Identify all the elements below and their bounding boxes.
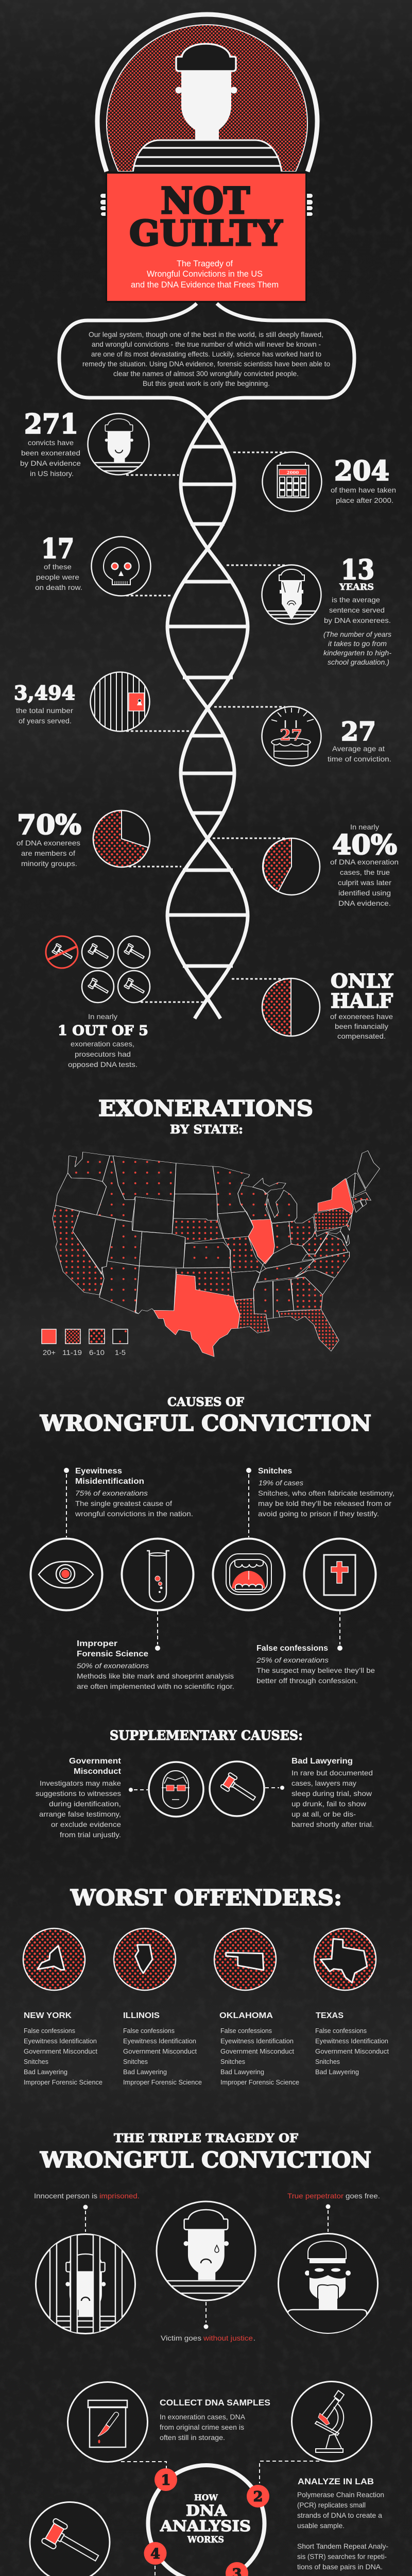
stat: 271: by DNA evidence xyxy=(20,459,81,467)
stat: 40%: of DNA exoneration xyxy=(330,858,399,866)
cause: false confessions: better off through confession. xyxy=(256,1676,358,1685)
stat: only half: HALF xyxy=(331,989,393,1012)
icon: microscope xyxy=(291,2381,372,2462)
list: Texas: Government Misconduct xyxy=(315,2047,389,2055)
tragedy: victim without justice xyxy=(154,2201,258,2342)
step 1: collect DNA samples: from original crime seen is xyxy=(160,2423,244,2431)
intro text: Our legal system, though one of the best in the world, is still deeply flawed, xyxy=(89,330,323,338)
list: Texas: Bad Lawyering xyxy=(315,2068,359,2076)
stat: 204: 204 xyxy=(334,455,389,487)
main DNA helix xyxy=(167,419,248,1019)
map legend: 6-10 xyxy=(89,1348,105,1357)
cause: snitches: Snitches, who often fabricate testimony, xyxy=(258,1489,394,1497)
supplementary: bad lawyering: Bad Lawyering xyxy=(291,1757,353,1766)
supplementary: government misconduct: or exclude evidence xyxy=(51,1820,121,1828)
icon: gavel xyxy=(210,1761,264,1816)
stat: 3,494: 3,494 xyxy=(14,682,75,704)
stat: 1 out of 5 xyxy=(58,1012,148,1069)
stat: 17 xyxy=(35,533,82,591)
heading: causes of wrongful conviction xyxy=(40,1395,371,1436)
title: GUILTY xyxy=(129,213,283,253)
gavel icons: 1 of 5 xyxy=(46,936,150,1003)
cause: snitches: Snitches xyxy=(258,1467,292,1476)
subtitle: and the DNA Evidence that Frees Them xyxy=(131,280,279,290)
stat: 13 years: YEARS xyxy=(339,582,374,592)
list: New York: Snitches xyxy=(24,2058,48,2065)
supplementary: bad lawyering: barred shortly after trial. xyxy=(291,1820,374,1828)
heading: causes of wrongful conviction: CAUSES OF xyxy=(167,1395,245,1409)
DNA analysis ring xyxy=(144,2465,269,2576)
list: New York: Eyewitness Identification xyxy=(24,2037,97,2045)
step 1: collect DNA samples: often still in storage. xyxy=(160,2433,225,2442)
stat: 271: been exonerated xyxy=(21,449,80,457)
stat: only half: been financially xyxy=(335,1022,388,1030)
step numbers: 4 xyxy=(150,2546,160,2562)
stat: 13 years: 13 xyxy=(341,554,374,586)
cause: false confessions xyxy=(256,1611,375,1685)
tragedy: innocent imprisoned: Innocent person is xyxy=(34,2192,97,2200)
step 2: analyze in lab: Polymerase Chain Reaction xyxy=(297,2490,384,2499)
supplementary: bad lawyering: In rare but documented xyxy=(291,1769,373,1777)
stat: 13 years: it takes to go from xyxy=(328,639,387,648)
map legend: 1-5 xyxy=(115,1348,126,1357)
step 1: collect DNA samples: COLLECT DNA SAMPLES xyxy=(160,2398,270,2408)
cause: forensic science: Improper xyxy=(77,1639,117,1648)
cause: eyewitness: Misidentification xyxy=(75,1477,144,1486)
stat: 3,494 xyxy=(14,682,75,725)
heading: supplementary causes: SUPPLEMENTARY CAUSES: xyxy=(110,1728,303,1743)
list: New York: Government Misconduct xyxy=(24,2047,97,2055)
left hand xyxy=(100,192,124,218)
stat: 13 years: (The number of years xyxy=(323,630,391,638)
supplementary: bad lawyering: cases, lawyers may xyxy=(291,1779,356,1787)
stat: 70%: minority groups. xyxy=(21,859,77,868)
cause: eyewitness: Eyewitness xyxy=(75,1467,122,1476)
cause: snitches: may be told they’ll be released from or xyxy=(258,1499,391,1507)
supplementary: government misconduct: during identification, xyxy=(49,1800,121,1808)
list: Oklahoma: Bad Lawyering xyxy=(220,2068,264,2076)
prisoner head xyxy=(175,44,237,140)
stat: 17: of these xyxy=(44,563,72,571)
icon: mouth xyxy=(213,1538,284,1611)
stat: 1 out of 5: opposed DNA tests. xyxy=(68,1060,138,1069)
stat: only half: of exonerees have xyxy=(330,1012,393,1021)
tragedy: victim without justice: without justice xyxy=(203,2334,253,2342)
supplementary: government misconduct: Government xyxy=(69,1757,122,1766)
heading: triple tragedy: THE TRIPLE TRAGEDY OF xyxy=(114,2131,299,2145)
step numbers: 2 xyxy=(253,2489,263,2505)
map legend xyxy=(42,1329,128,1357)
ring title xyxy=(160,2493,251,2545)
outline: New York xyxy=(38,1946,64,1970)
cause: false confessions: 25% of exonerations xyxy=(256,1656,329,1664)
list: Illinois: Eyewitness Identification xyxy=(123,2037,196,2045)
list: Texas xyxy=(315,2011,389,2076)
stat: 17: people were xyxy=(36,573,79,581)
stat: 70% xyxy=(16,809,81,868)
stat: 40%: identified using xyxy=(338,889,391,897)
intro text: remedy the situation. Using DNA evidence, forensic scientists have been able to xyxy=(82,360,330,368)
stat: 13 years: sentence served xyxy=(329,606,385,614)
stat: 40% xyxy=(330,823,399,907)
US map xyxy=(53,1150,380,1357)
supplementary: government misconduct xyxy=(36,1757,122,1839)
intro text xyxy=(82,330,330,387)
ring title: HOW xyxy=(194,2493,218,2502)
supplementary: bad lawyering: up at all, or be dis- xyxy=(291,1810,356,1818)
step 2: analyze in lab: (PCR) replicates small xyxy=(297,2501,366,2509)
list: Texas: Eyewitness Identification xyxy=(315,2037,388,2045)
outline: Oklahoma xyxy=(226,1953,264,1970)
stat: 1 out of 5: In nearly xyxy=(88,1012,117,1021)
stat: 271: 271 xyxy=(24,409,78,440)
hero: prisoner portrait xyxy=(97,14,317,173)
stat: 40%: cases, the true xyxy=(340,868,390,876)
supplementary: government misconduct: suggestions to witnesses xyxy=(36,1789,121,1798)
cause: false confessions: The suspect may believe they’ll be xyxy=(256,1666,375,1674)
tragedy: perpetrator goes free: True perpetrator xyxy=(287,2192,344,2200)
cause: false confessions: False confessions xyxy=(256,1644,328,1653)
title: NOT xyxy=(161,179,250,222)
icon: gavel xyxy=(30,2502,110,2576)
stat: 13 years xyxy=(323,554,391,666)
stat: only half: ONLY xyxy=(331,970,393,992)
tragedy: innocent imprisoned xyxy=(34,2192,140,2339)
outline: Illinois xyxy=(135,1945,152,1973)
stat: 17: 17 xyxy=(41,533,74,565)
stat: 1 out of 5: 1 OUT OF 5 xyxy=(58,1023,148,1039)
stat: 13 years: by DNA exonerees. xyxy=(324,616,391,624)
stat: 70%: are members of xyxy=(21,849,75,857)
stat: 271 xyxy=(20,409,81,478)
helix dotted connectors xyxy=(126,452,286,1002)
subtitle xyxy=(131,259,279,290)
icon: smiling exoneree xyxy=(88,413,149,475)
stat: 27 xyxy=(328,716,391,763)
stat: 40%: In nearly xyxy=(350,823,379,831)
heading: exonerations by state xyxy=(98,1096,313,1137)
icon: bearded old man xyxy=(262,565,321,624)
stat: 13 years: is the average xyxy=(332,596,380,604)
list: Oklahoma xyxy=(219,2011,299,2086)
step 2: analyze in lab xyxy=(297,2477,388,2571)
stat: only half xyxy=(330,970,393,1040)
heading: worst offenders: WORST OFFENDERS: xyxy=(70,1885,342,1910)
intro text: and wrongful convictions - the true number of which will never be known - xyxy=(92,340,321,348)
stat: 1 out of 5: exoneration cases, xyxy=(71,1040,134,1048)
intro text: But this great work is only the beginning. xyxy=(143,379,270,387)
list: Oklahoma: Improper Forensic Science xyxy=(220,2078,299,2086)
stat: 271: in US history. xyxy=(30,469,74,478)
prisoner shoulders xyxy=(133,140,282,173)
stat: 40%: 40% xyxy=(332,829,397,861)
ring title: DNA xyxy=(186,2502,227,2519)
tragedy: perpetrator goes free xyxy=(278,2192,380,2334)
ring title: WORKS xyxy=(187,2535,224,2545)
step 4: present evidence at trial xyxy=(30,2502,148,2576)
stat: 27: time of conviction. xyxy=(328,755,391,763)
step numbers: 1 xyxy=(161,2472,170,2488)
stat: 27: Average age at xyxy=(332,744,385,753)
stat: 204: place after 2000. xyxy=(336,496,393,504)
connector: government xyxy=(129,1788,148,1792)
stat: only half: compensated. xyxy=(337,1032,386,1040)
list: Illinois: Government Misconduct xyxy=(123,2047,197,2055)
pie: half xyxy=(262,978,320,1036)
supplementary: government misconduct: arrange false testimony, xyxy=(39,1810,121,1818)
supplementary: bad lawyering: up drunk, fail to show xyxy=(291,1800,367,1808)
stat: 3,494: the total number xyxy=(16,706,73,715)
subtitle: The Tragedy of xyxy=(177,259,233,268)
stat: 17: on death row. xyxy=(35,583,82,591)
cause: eyewitness: The single greatest cause of xyxy=(75,1499,172,1507)
step 2: analyze in lab: usable sample. xyxy=(297,2521,345,2530)
ring title: ANALYSIS xyxy=(160,2517,251,2535)
icon: test tube xyxy=(122,1538,194,1611)
icon: eye xyxy=(31,1538,102,1611)
list: Texas: False confessions xyxy=(315,2027,367,2035)
connector: lawyering xyxy=(265,1786,284,1790)
stat: 3,494: of years served. xyxy=(19,717,72,725)
stat: 40%: DNA evidence. xyxy=(338,899,391,907)
pie: 40 percent xyxy=(263,838,320,895)
cause: snitches xyxy=(246,1467,394,1537)
supplementary: government misconduct: from trial unjustly. xyxy=(60,1831,121,1839)
step 2: analyze in lab: strands of DNA to create a xyxy=(297,2511,382,2519)
list: Texas: TEXAS xyxy=(316,2011,344,2020)
list: Illinois: Improper Forensic Science xyxy=(123,2078,202,2086)
halftone egg xyxy=(107,25,307,172)
heading: triple tragedy xyxy=(40,2131,371,2173)
stat: 204 xyxy=(331,455,396,504)
intro text: are one of its most devastating effects. Luckily, science has worked hard to xyxy=(91,350,321,358)
step 2: analyze in lab: Short Tandem Repeat Analy- xyxy=(297,2542,388,2550)
cause: forensic science: are often implemented with no scientific rigor. xyxy=(77,1682,234,1690)
list: Texas: Snitches xyxy=(315,2058,340,2065)
cause: forensic science: Forensic Science xyxy=(77,1650,148,1658)
right hand xyxy=(289,192,313,218)
stat: 271: convicts have xyxy=(28,438,74,447)
list: Illinois: False confessions xyxy=(123,2027,175,2035)
step 2: analyze in lab: tions of base pairs in DNA. xyxy=(297,2563,383,2571)
step 1: collect DNA samples: In exoneration cases, DNA xyxy=(160,2413,246,2421)
cause: forensic science xyxy=(77,1611,234,1690)
tragedy: perpetrator goes free: goes free. xyxy=(346,2192,380,2200)
stat: 40%: culprit was later xyxy=(338,878,391,887)
heading: exonerations by state: EXONERATIONS xyxy=(98,1096,313,1121)
icon: calendar 2000: 2000 xyxy=(287,470,299,476)
intro text: clear the names of almost 300 wrongfully convicted people. xyxy=(113,369,299,378)
list: New York: Bad Lawyering xyxy=(24,2068,67,2076)
icon: man in red glasses xyxy=(149,1762,203,1817)
subtitle: Wrongful Convictions in the US xyxy=(147,269,263,279)
title xyxy=(129,179,283,253)
cause: eyewitness: wrongful convictions in the nation. xyxy=(75,1510,193,1518)
tragedy: innocent imprisoned: imprisoned. xyxy=(99,2192,140,2200)
state badges xyxy=(23,1928,376,1990)
icon: birthday cake: 27 xyxy=(280,726,302,744)
map legend: 11-19 xyxy=(62,1348,82,1357)
tragedy: victim without justice: . xyxy=(253,2334,255,2342)
list: Oklahoma: OKLAHOMA xyxy=(219,2011,273,2020)
cause: snitches: 19% of cases xyxy=(259,1479,303,1487)
list: Oklahoma: False confessions xyxy=(220,2027,272,2035)
stat: 13 years: school graduation.) xyxy=(328,658,389,666)
cause: forensic science: 50% of exonerations xyxy=(77,1662,149,1670)
stat: 1 out of 5: prosecutors had xyxy=(75,1050,131,1058)
heading: exonerations by state: BY STATE: xyxy=(170,1123,243,1137)
heading: causes of wrongful conviction: WRONGFUL CONVICTION xyxy=(40,1411,371,1436)
step numbers xyxy=(144,2468,269,2576)
cause: eyewitness xyxy=(64,1467,193,1537)
list: New York xyxy=(24,2011,102,2086)
supplementary: government misconduct: Misconduct xyxy=(74,1767,122,1776)
icon: birthday cake xyxy=(262,707,321,766)
intro cartouche xyxy=(59,303,354,419)
stat: 27: 27 xyxy=(341,716,376,747)
list: New York: False confessions xyxy=(24,2027,75,2035)
icon: skull xyxy=(92,537,150,596)
title sign xyxy=(106,172,307,303)
cause: forensic science: Methods like bite mark and shoeprint analysis xyxy=(77,1672,234,1680)
supplementary: bad lawyering xyxy=(291,1757,374,1828)
step 2: analyze in lab: ANALYZE IN LAB xyxy=(298,2477,374,2486)
list: Illinois xyxy=(123,2011,202,2086)
stat: 70%: of DNA exonerees xyxy=(16,839,80,847)
outer egg frame xyxy=(97,14,317,172)
list: Illinois: ILLINOIS xyxy=(123,2011,160,2020)
cause: eyewitness: 75% of exonerations xyxy=(75,1489,148,1497)
list: New York: Improper Forensic Science xyxy=(24,2078,102,2086)
icon: calendar 2000 xyxy=(263,452,321,511)
icon: cell bars with lock xyxy=(91,672,149,732)
stat: 13 years: kindergarten to high- xyxy=(323,649,391,657)
list: Oklahoma: Government Misconduct xyxy=(220,2047,294,2055)
step 1: collect DNA samples xyxy=(68,2382,270,2462)
stat: 70%: 70% xyxy=(17,809,81,841)
icon: evidence bag with knife xyxy=(68,2382,147,2462)
icon: bible xyxy=(304,1538,376,1611)
list: New York: NEW YORK xyxy=(24,2011,72,2020)
cause: snitches: avoid going to prison if they testify. xyxy=(258,1510,379,1518)
list: Illinois: Bad Lawyering xyxy=(123,2068,167,2076)
outline: Texas xyxy=(320,1939,367,1982)
stat: 204: of them have taken xyxy=(331,486,396,494)
supplementary: bad lawyering: sleep during trial, show xyxy=(291,1789,372,1798)
list: Oklahoma: Snitches xyxy=(220,2058,245,2065)
supplementary: government misconduct: Investigators may make xyxy=(40,1779,121,1787)
pie: 70 percent xyxy=(93,810,150,867)
tragedy: victim without justice: Victim goes xyxy=(161,2334,201,2342)
map legend: 20+ xyxy=(43,1348,56,1357)
step connectors xyxy=(81,2461,319,2576)
heading: triple tragedy: WRONGFUL CONVICTION xyxy=(40,2147,371,2173)
list: Oklahoma: Eyewitness Identification xyxy=(220,2037,294,2045)
list: Illinois: Snitches xyxy=(123,2058,148,2065)
step 2: analyze in lab: sis (STR) searches for repeti- xyxy=(297,2552,387,2561)
